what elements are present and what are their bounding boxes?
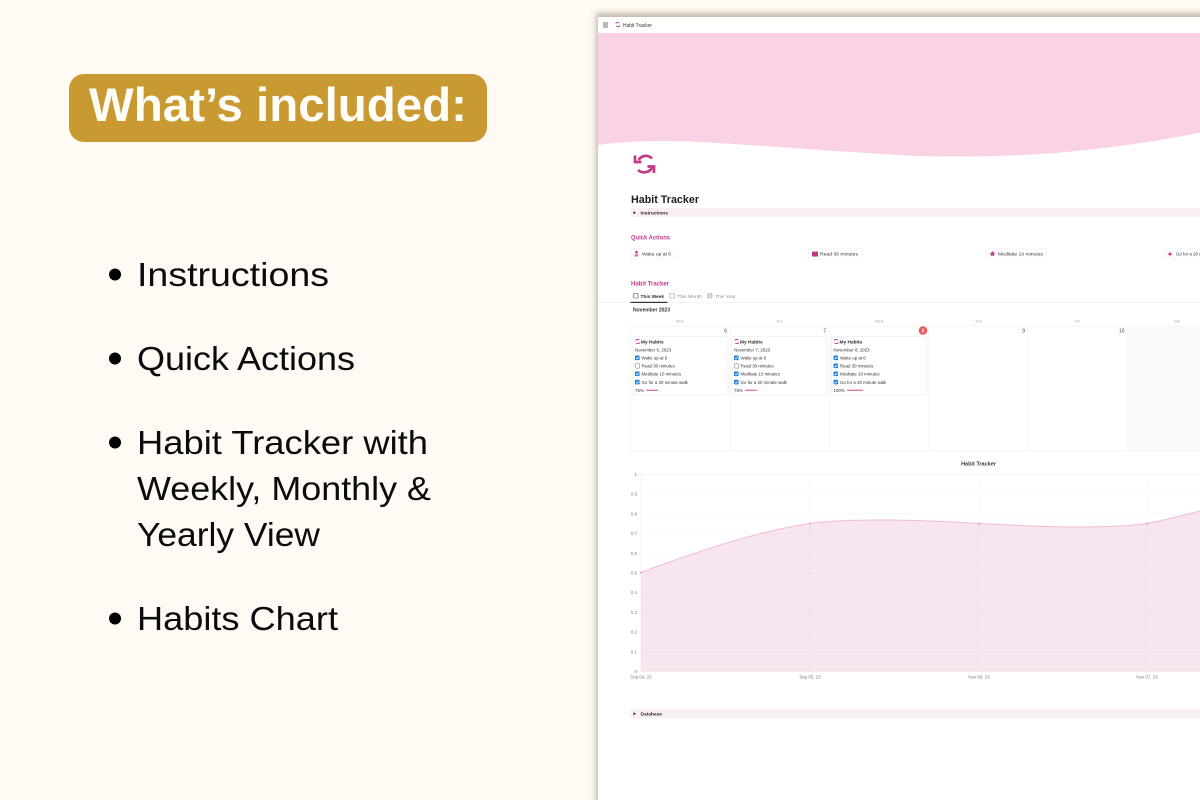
- weekday labels: [676, 318, 1181, 324]
- button: Go for a 20 minute walk: [1164, 248, 1200, 259]
- cover banner wave: [598, 33, 1200, 156]
- card: November 8: Wake up at 6: [840, 356, 866, 360]
- weekday labels: Sat: [1174, 318, 1181, 324]
- button: Meditate 10 minutes: [986, 248, 1046, 259]
- bullet: Instructions: Instructions: [137, 256, 329, 293]
- y axis labels: 0.3: [631, 610, 638, 615]
- card: November 6: Go for a 20 minute walk: [642, 380, 689, 385]
- view tabs: This Month: [677, 294, 702, 299]
- bullet: Habit Tracker views: [109, 424, 431, 553]
- month label: November 2023: [633, 308, 670, 314]
- card: November 6: 75%: [635, 388, 644, 393]
- y axis labels: 0.2: [631, 630, 638, 635]
- card: November 7: [732, 336, 827, 395]
- chart title: Habit Tracker: [961, 462, 997, 468]
- area: [641, 511, 1200, 671]
- x axis labels: Nov 06, 23: [968, 675, 990, 680]
- card: November 6: Wake up at 6: [642, 356, 668, 360]
- view tabs: This Week: [640, 294, 664, 299]
- y axis labels: 0.7: [631, 531, 638, 536]
- icon: page sync arrows: [635, 156, 654, 173]
- bullet list: [109, 256, 431, 637]
- weekday labels: Mon: [676, 318, 684, 324]
- y axis labels: 0.8: [631, 511, 638, 516]
- card: November 6: [633, 336, 728, 395]
- bullet: Habits Chart: Habits Chart: [137, 600, 338, 637]
- y axis labels: [631, 472, 638, 674]
- x axis labels: Sep 05, 23: [799, 675, 821, 680]
- card: November 7: November 7, 2023: [734, 348, 771, 352]
- bullet: Habit Tracker views: Weekly, Monthly &: [137, 470, 431, 507]
- card: November 7: Read 30 minutes: [740, 364, 774, 368]
- grid lines: [641, 474, 1200, 671]
- card: November 8: Meditate 10 minutes: [840, 372, 880, 376]
- card: November 6: November 6, 2023: [635, 348, 672, 352]
- card: November 8: 100%: [834, 388, 845, 393]
- area chart: habit completion: [630, 472, 1200, 680]
- card: November 7: My Habits: [740, 340, 763, 346]
- card: November 7: Go for a 20 minute walk: [740, 380, 788, 385]
- card: November 8: My Habits: [840, 340, 862, 346]
- y axis labels: 0.1: [631, 649, 638, 654]
- button: Meditate 10 minutes: Meditate 10 minutes: [998, 252, 1044, 256]
- top bar: [598, 17, 1200, 33]
- weekday labels: Wed: [875, 318, 883, 324]
- weekday labels: Thu: [975, 318, 982, 324]
- weekday labels: Tue: [776, 318, 784, 324]
- calendar week view: [630, 318, 1200, 451]
- calendar week view: 10: [1119, 328, 1125, 334]
- card: November 7: Meditate 10 minutes: [740, 372, 781, 376]
- heading: Quick Actions: Quick Actions: [631, 236, 671, 242]
- card: November 7: Wake up at 6: [740, 356, 767, 360]
- heading: Habit Tracker section: Habit Tracker: [631, 282, 670, 288]
- button: Read 30 minutes: Read 30 minutes: [820, 252, 859, 256]
- y axis labels: 0.9: [631, 492, 638, 497]
- card: November 6: Meditate 10 minutes: [642, 372, 682, 376]
- weekday labels: Fri: [1075, 318, 1080, 324]
- card: November 7: 75%: [734, 388, 743, 393]
- top bar: Habit Tracker: [623, 23, 652, 29]
- card: November 8: November 8, 2023: [834, 348, 870, 352]
- card: November 8: [832, 336, 926, 395]
- bullet: Quick Actions: Quick Actions: [137, 340, 355, 377]
- panel: notion screenshot: [596, 13, 1200, 800]
- x axis labels: [630, 675, 1158, 680]
- card: November 6: My Habits: [641, 340, 664, 346]
- bullet: Habit Tracker views: Yearly View: [137, 516, 320, 553]
- points: [640, 522, 1148, 574]
- line: [641, 511, 1200, 572]
- y axis labels: 0.6: [631, 551, 638, 556]
- toggle: Database: Database: [640, 712, 662, 716]
- page title: Habit Tracker: [631, 194, 700, 206]
- calendar week view: 9: [1022, 328, 1025, 334]
- heading: What's included: [69, 74, 487, 142]
- card: November 8: Read 30 minutes: [840, 364, 874, 368]
- x axis labels: Nov 07, 23: [1136, 675, 1158, 680]
- calendar week view: 7: [823, 328, 826, 334]
- toggle: Database: [630, 709, 1200, 718]
- bullet: Habit Tracker views: Habit Tracker with: [137, 424, 428, 461]
- y axis labels: 0.5: [631, 570, 638, 576]
- y axis labels: 0.4: [631, 590, 638, 595]
- card: November 8: Go for a 20 minute walk: [840, 380, 887, 385]
- toggle: Instructions: [631, 208, 1200, 217]
- y axis labels: 1: [635, 472, 638, 477]
- card: November 6: Read 30 minutes: [642, 364, 675, 368]
- view tabs: This Year: [715, 294, 736, 299]
- view tabs: [598, 294, 1200, 303]
- y axis labels: 0: [635, 669, 638, 674]
- toggle: Instructions: Instructions: [640, 210, 668, 216]
- calendar week view: 8: [922, 328, 925, 334]
- button: Wake up at 6: Wake up at 6: [642, 252, 672, 256]
- button: Wake up at 6: [631, 248, 675, 259]
- button: Read 30 minutes: [808, 248, 862, 259]
- heading: What's included: What’s included:: [89, 78, 467, 131]
- x axis labels: Sep 04, 23: [630, 675, 652, 680]
- date numbers: 6: [724, 328, 727, 334]
